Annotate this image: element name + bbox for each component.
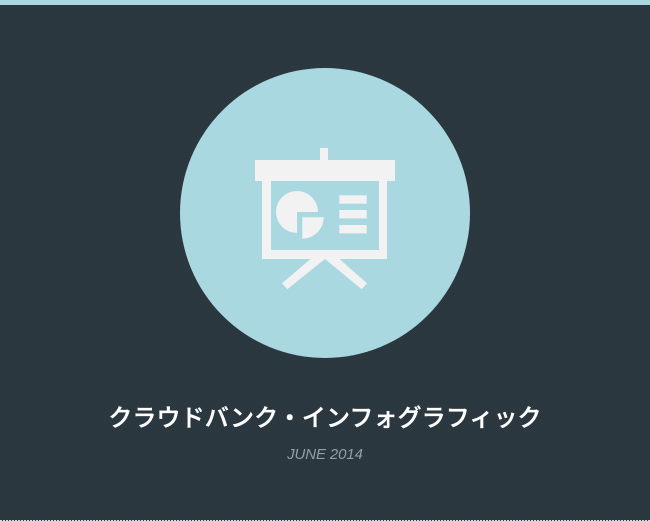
pie chart main slice (276, 191, 318, 233)
tripod legs (282, 258, 367, 289)
screen frame (262, 181, 387, 259)
date: JUNE 2014 (287, 446, 363, 463)
top accent bar (0, 0, 650, 5)
list lines (339, 195, 367, 233)
title: クラウドバンク・インフォグラフィック (108, 405, 542, 432)
icon: presentation screen (255, 148, 395, 289)
screen roller bar (255, 160, 395, 181)
pie chart detached slice (302, 217, 324, 239)
screen mount stem (320, 148, 328, 161)
light blue circle (180, 68, 470, 358)
